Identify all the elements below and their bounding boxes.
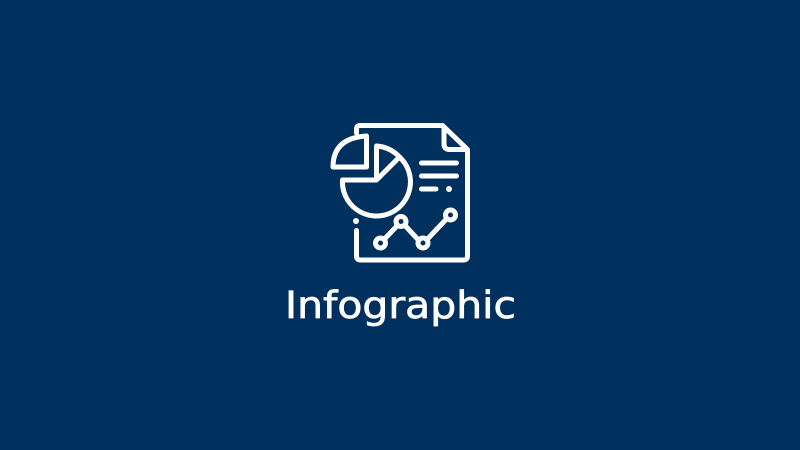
icon: pie chart (342, 146, 410, 216)
icon: dots (353, 186, 452, 224)
icon: pie slice (333, 136, 366, 167)
icon: folded corner (444, 127, 467, 150)
icon: text lines (422, 163, 456, 189)
icon: document outline (356, 126, 468, 260)
icon: line chart (385, 220, 445, 238)
icon: report document with charts (333, 126, 468, 260)
title: Infographic (285, 284, 516, 327)
